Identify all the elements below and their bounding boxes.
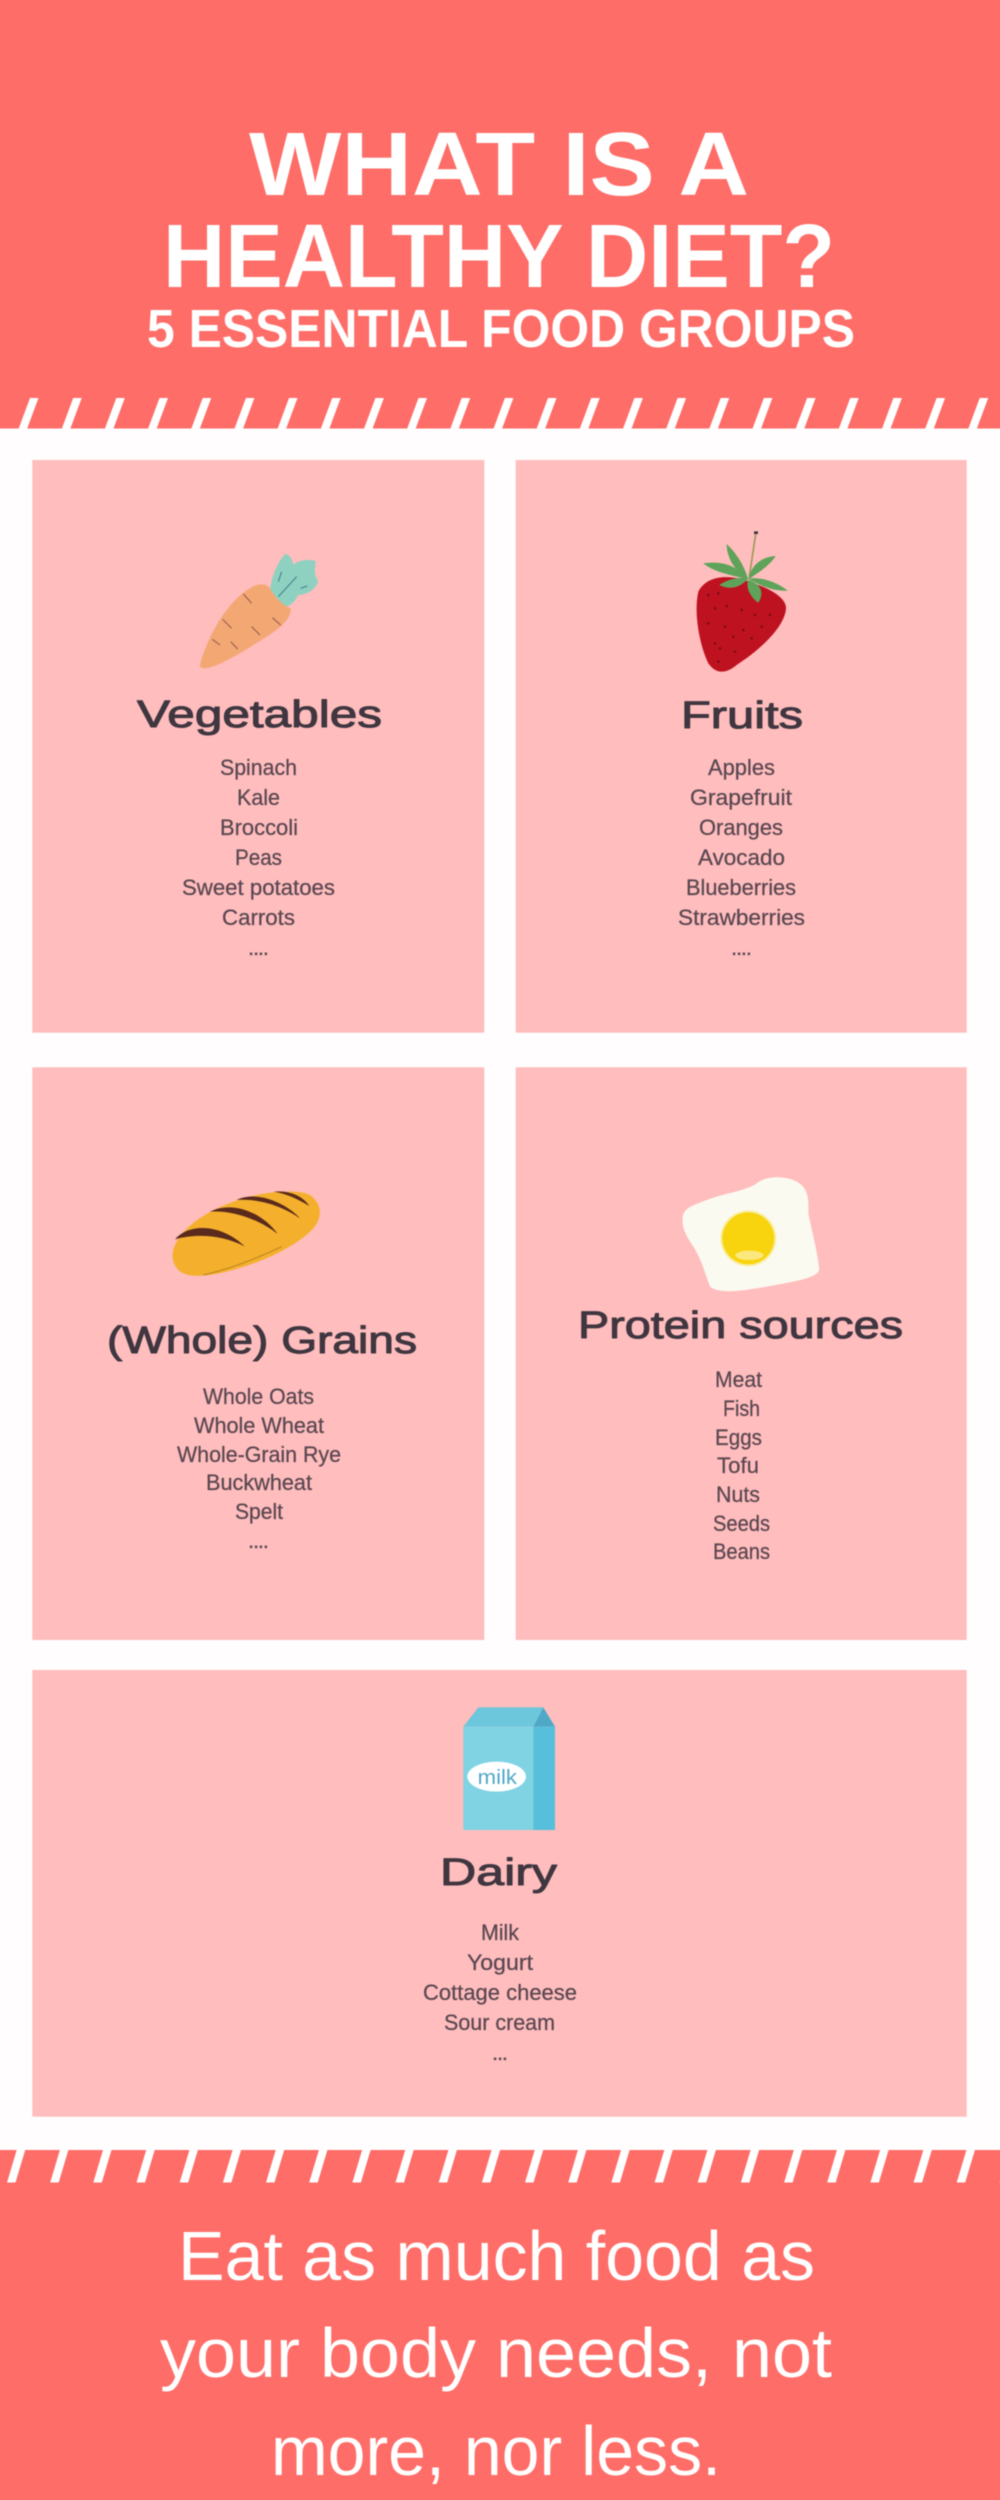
food list: Broccoli — [220, 815, 298, 840]
food list — [182, 755, 335, 960]
food list: Eggs — [715, 1425, 762, 1450]
title: HEALTHY DIET? — [163, 207, 835, 307]
food list: Apples — [708, 755, 775, 780]
food list — [678, 755, 805, 960]
icon: milk carton: milk — [478, 1767, 518, 1789]
panel: vegetables — [32, 460, 484, 1033]
icon: milk carton — [463, 1707, 555, 1830]
food list: Avocado — [698, 845, 785, 870]
food list: Strawberries — [678, 905, 805, 930]
title: WHAT IS A — [249, 115, 749, 215]
heading: Vegetables — [137, 694, 382, 736]
food list: Oranges — [699, 815, 783, 840]
food list: Carrots — [222, 905, 295, 930]
food list: Whole Oats — [203, 1384, 314, 1409]
food list — [713, 1367, 770, 1564]
heading: Fruits — [681, 695, 803, 737]
food list: Blueberries — [686, 875, 796, 900]
heading: Protein sources — [578, 1305, 903, 1347]
title — [163, 115, 835, 307]
closing message: more, nor less. — [271, 2412, 721, 2490]
food list: Whole-Grain Rye — [177, 1442, 341, 1467]
food list: .... — [248, 935, 269, 960]
food list: Sweet potatoes — [182, 875, 335, 900]
panel: whole grains — [32, 1067, 484, 1640]
food list — [177, 1384, 341, 1553]
food list: Sour cream — [444, 2010, 555, 2035]
heading: (Whole) Grains — [107, 1320, 417, 1362]
food list: Nuts — [716, 1482, 760, 1507]
food list: Peas — [235, 845, 282, 870]
food list: Yogurt — [467, 1950, 533, 1975]
food list: Whole Wheat — [194, 1413, 324, 1438]
panel: fruits — [516, 460, 967, 1033]
icon: carrot — [200, 554, 318, 668]
panel: protein sources — [516, 1067, 967, 1640]
food list: Beans — [713, 1539, 770, 1564]
food list: Milk — [481, 1920, 520, 1945]
food list: Buckwheat — [206, 1470, 312, 1495]
icon: bread — [173, 1191, 320, 1276]
panel: dairy — [32, 1670, 967, 2117]
food list: Spinach — [220, 755, 297, 780]
closing message: Eat as much food as — [178, 2217, 815, 2295]
icon: strawberry — [697, 531, 788, 672]
subtitle: 5 ESSENTIAL FOOD GROUPS — [147, 299, 855, 359]
closing message: your body needs, not — [160, 2314, 832, 2392]
closing message — [160, 2217, 832, 2490]
food list: Fish — [723, 1396, 760, 1421]
food list: .... — [248, 1528, 269, 1553]
food list: ... — [492, 2040, 508, 2065]
food list: Kale — [237, 785, 280, 810]
food list: Meat — [715, 1367, 762, 1392]
food list: Grapefruit — [690, 785, 792, 810]
heading: Dairy — [440, 1852, 557, 1894]
icon: fried egg — [683, 1177, 819, 1291]
food list: Cottage cheese — [423, 1980, 577, 2005]
header banner — [0, 0, 1000, 429]
food list: Tofu — [717, 1453, 759, 1478]
footer banner — [0, 2149, 1000, 2500]
food list — [423, 1920, 577, 2065]
food list: .... — [731, 935, 752, 960]
food list: Spelt — [235, 1499, 283, 1524]
food list: Seeds — [713, 1511, 770, 1536]
